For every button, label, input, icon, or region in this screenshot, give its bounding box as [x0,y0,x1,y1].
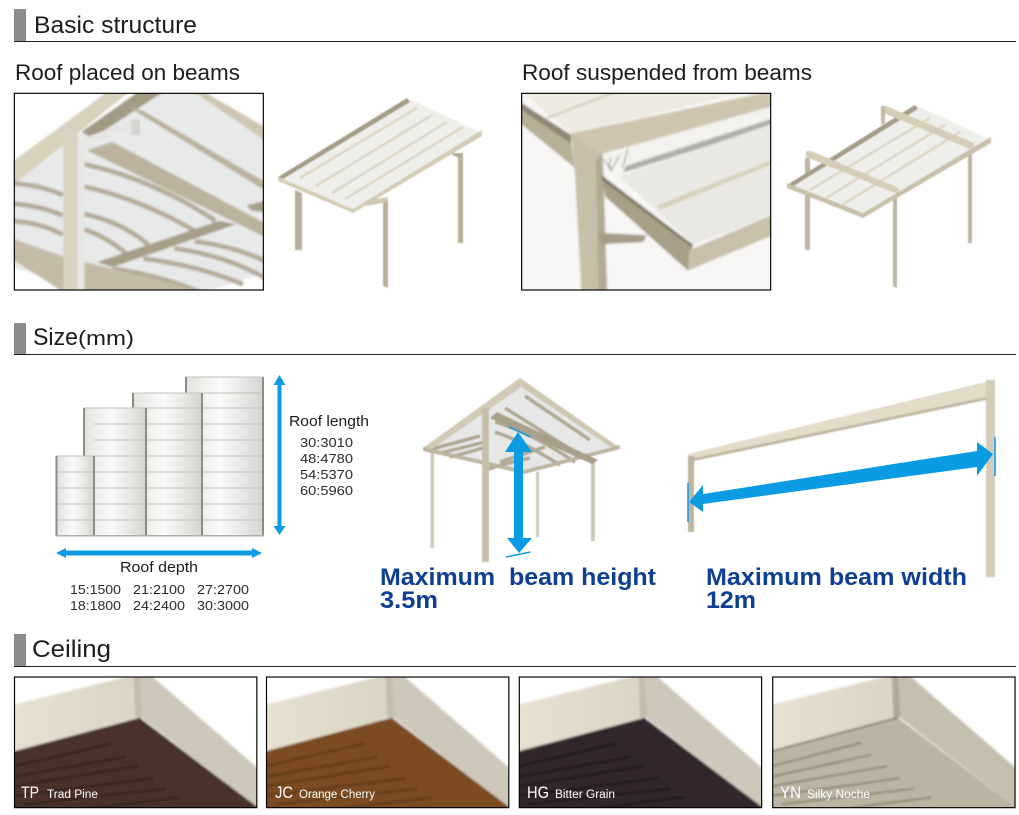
label: roof depth values: 15:1500 [70,582,121,597]
swatch: HG Bitter Grain: Bitter Grain [555,789,615,801]
heading: Size (mm) [14,323,1016,355]
heading: Basic structure: Basic structure [34,12,197,39]
swatch: TP Trad Pine: Trad Pine [47,789,98,801]
label: roof depth values: 18:1800 [70,598,121,613]
heading: Ceiling [14,634,1016,667]
swatch: HG Bitter Grain: HG [527,783,549,802]
arrow: roof depth [56,548,262,558]
photo: roof placed on beams close-up [11,90,267,293]
swatch: JC Orange Cherry: Orange Cherry [299,789,375,801]
label: roof depth values [70,559,249,613]
diagram: roof sizes plan [56,377,264,536]
swatch: JC Orange Cherry [262,674,514,810]
label: maximum beam width: 12m [706,587,756,614]
photo: roof suspended from beams close-up [518,90,774,293]
heading: Size (mm): (mm) [78,328,134,350]
swatch: JC Orange Cherry: JC [275,783,293,802]
heading: Size (mm): Size [33,324,78,351]
label: roof depth values: 30:3000 [197,598,249,613]
swatch: TP Trad Pine [10,674,262,810]
swatch: HG Bitter Grain [514,674,766,810]
label: maximum beam height: 3.5m [380,587,438,614]
label: roof depth values: 24:2400 [133,598,185,613]
arrow: beam width [688,437,995,522]
illustration: pergola with suspended roof [787,105,991,288]
arrow: beam height [505,427,532,557]
label: roof depth values: 27:2700 [197,582,249,597]
label: roof length values: 54:5370 [300,467,353,482]
heading: Basic structure [14,9,1016,42]
label: roof length values: Roof length [289,413,369,430]
panel: depth 15 [56,456,94,536]
panel: depth 30 [185,377,264,536]
illustration: beam frame [688,380,995,577]
label: maximum beam width [706,564,967,614]
label: maximum beam width: Maximum beam width [706,564,967,591]
arrow: roof length [274,375,286,535]
illustration: pergola with roof on beams [278,98,482,288]
swatch: YN Silky Noche [768,674,1019,810]
swatch: YN Silky Noche: Silky Noche [807,789,870,801]
label: roof length values: 48:4780 [300,451,353,466]
label: roof depth values: 21:2100 [133,582,185,597]
panel: depth 24 [132,393,202,536]
label: roof length values [289,413,369,498]
panel: depth 18 [83,408,146,536]
label: maximum beam height: Maximum beam height [380,564,656,591]
swatch: YN Silky Noche: YN [780,783,801,802]
subheading: Roof placed on beams: Roof placed on beams [15,60,240,85]
illustration: pergola from below [423,378,620,562]
label: roof length values: 60:5960 [300,483,353,498]
swatch: TP Trad Pine: TP [21,783,39,802]
heading: Ceiling: Ceiling [32,636,111,663]
subheading: Roof suspended from beams: Roof suspended from beams [522,60,812,85]
label: roof depth values: Roof depth [120,559,198,576]
label: maximum beam height [380,564,656,614]
label: roof length values: 30:3010 [300,435,353,450]
